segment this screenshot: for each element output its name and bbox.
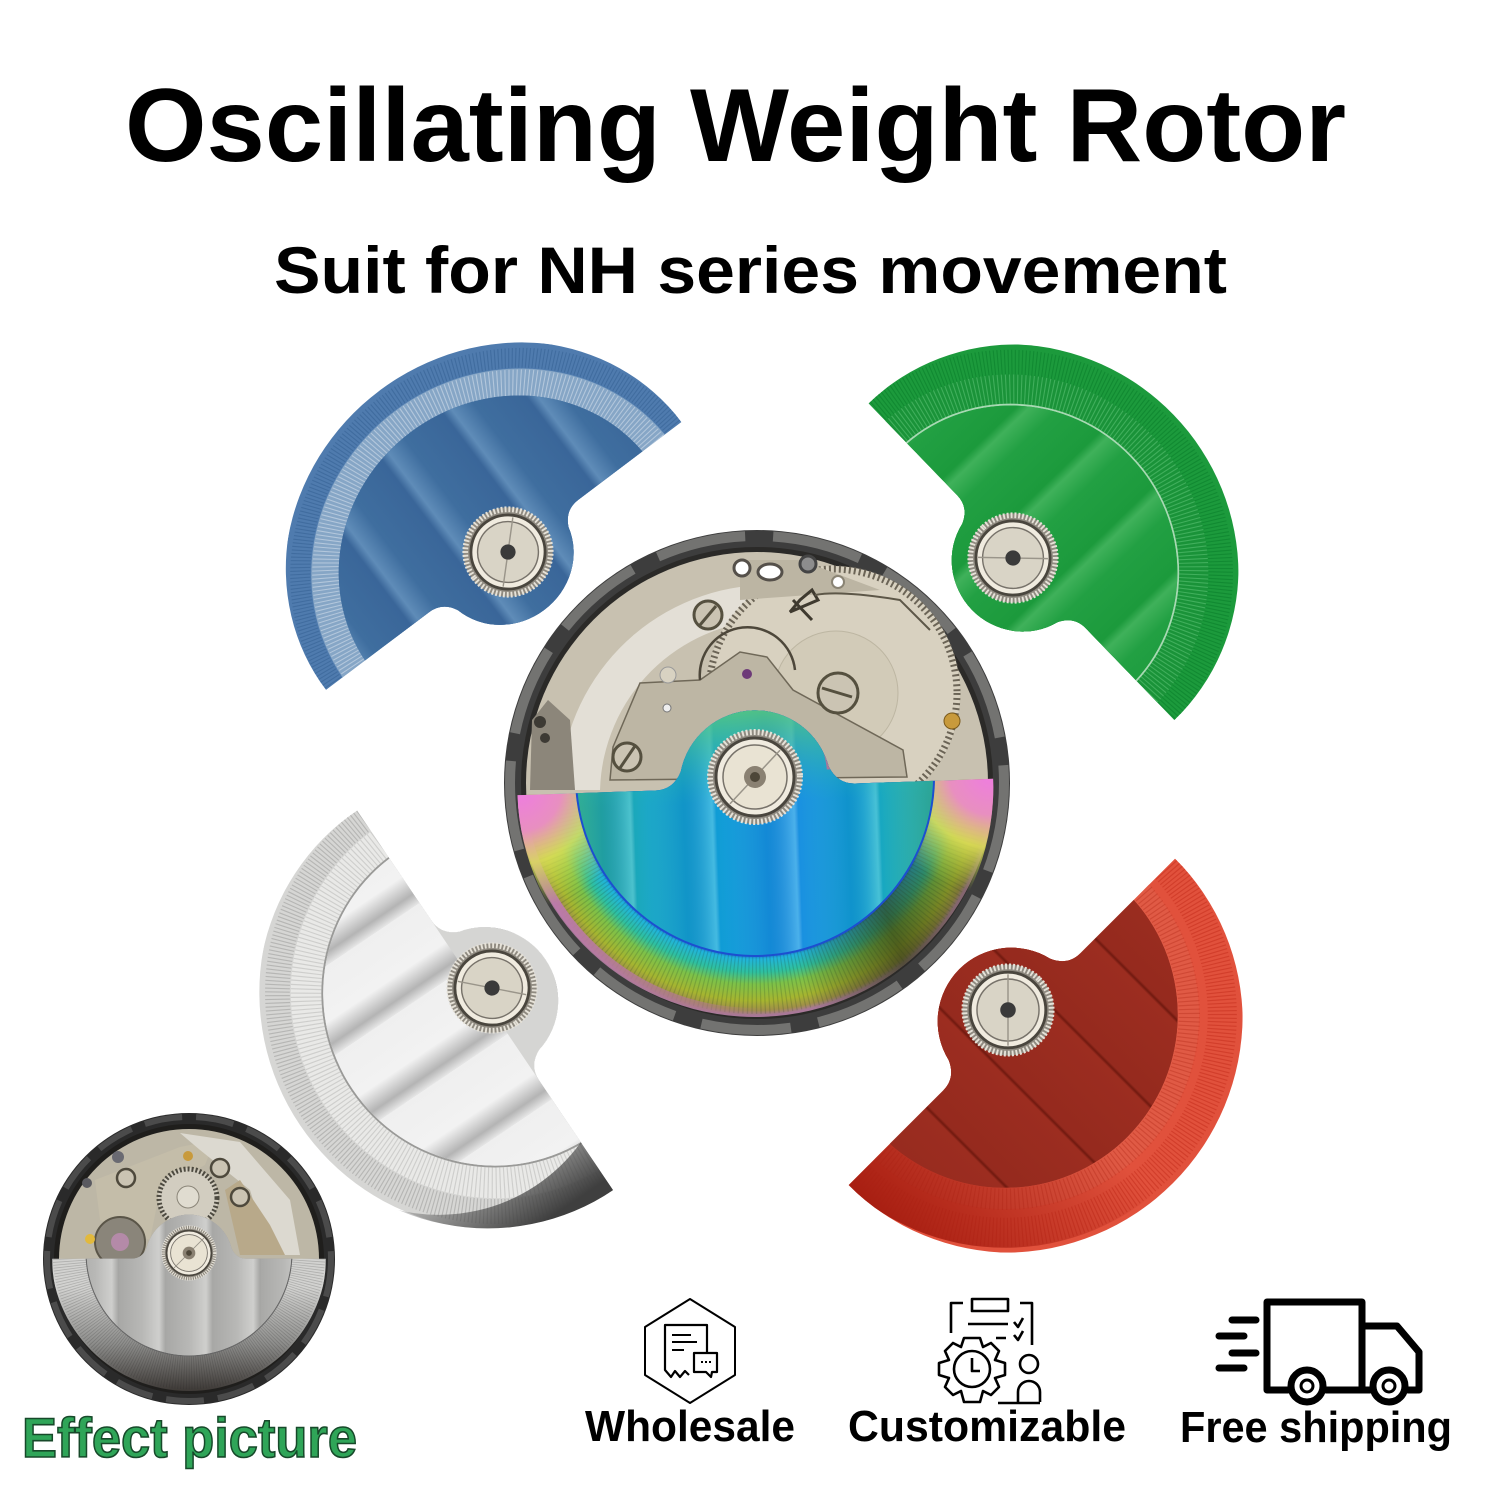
center movement with iridescent rotor [504, 530, 1010, 1036]
subtitle: Suit for NH series movement [274, 233, 1227, 307]
label: customizable: Customizable [848, 1402, 1126, 1451]
label: effect picture: Effect picture [22, 1406, 357, 1469]
rotor: silver white [259, 810, 613, 1228]
icon: free shipping truck [1219, 1302, 1419, 1402]
movement mechanism [526, 552, 988, 1014]
label: wholesale: Wholesale [585, 1402, 795, 1451]
small movement case [43, 1113, 335, 1405]
movement case [504, 530, 1010, 1036]
rotor: green [868, 344, 1238, 720]
jewels and holes [534, 556, 960, 743]
rotor: blue [286, 342, 682, 690]
small mechanism [59, 1129, 319, 1389]
title: Oscillating Weight Rotor [125, 68, 1346, 184]
icon: wholesale [645, 1299, 735, 1403]
rotor: red [848, 858, 1243, 1253]
label: free shipping: Free shipping [1180, 1403, 1452, 1452]
icon: customizable [939, 1299, 1040, 1403]
screws [613, 601, 858, 771]
small rotor [52, 1214, 326, 1391]
rotor: iridescent [518, 710, 994, 1017]
effect picture: small movement [43, 1113, 335, 1405]
